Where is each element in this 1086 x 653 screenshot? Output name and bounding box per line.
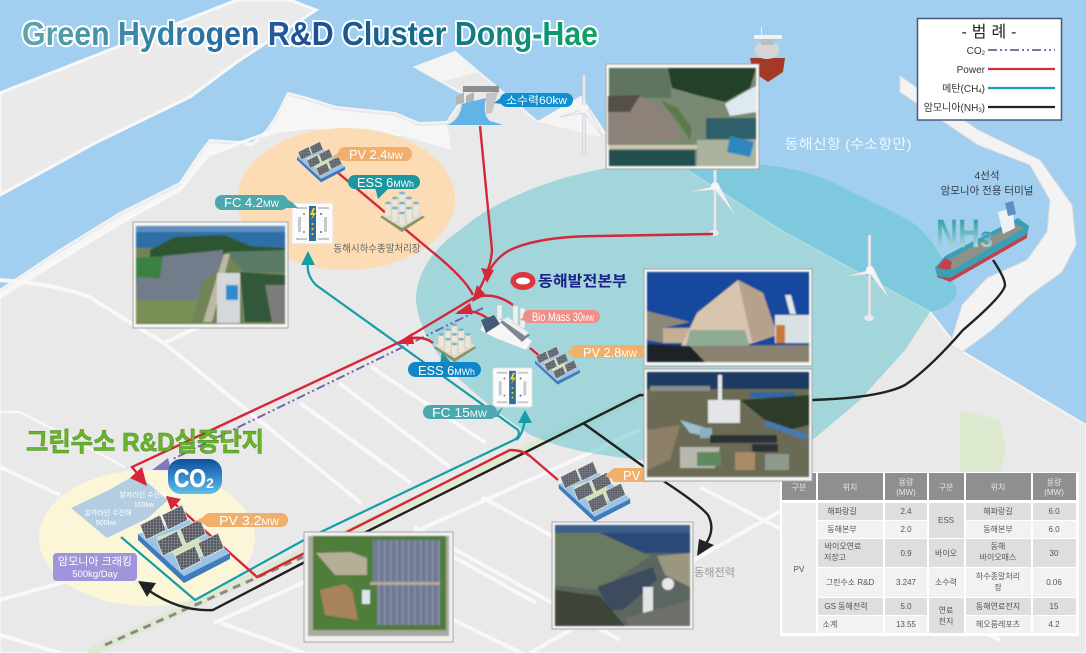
table: capacity by site: ESS bbox=[938, 516, 954, 525]
table: capacity by site: 해파랑길 bbox=[827, 506, 857, 516]
legend: 3 bbox=[978, 108, 982, 114]
NH3 ship bbox=[935, 201, 1029, 282]
wind turbine 2 bbox=[688, 170, 735, 236]
photo: bottom-left solar field bbox=[304, 532, 453, 642]
legend: ) bbox=[982, 103, 985, 114]
table: capacity by site: 구분 bbox=[792, 483, 806, 492]
label: ammonia terminal: 4선석 bbox=[974, 170, 1000, 182]
photo: biomass building bbox=[644, 269, 812, 366]
table: capacity by site: 저장고 bbox=[824, 552, 846, 562]
solar array: PV bottom bbox=[559, 461, 630, 522]
wind turbine 1 bbox=[560, 75, 603, 161]
table: capacity by site: 0.9 bbox=[900, 549, 912, 558]
electrolyser plots bbox=[71, 474, 168, 538]
zone: sewage plant (peach) bbox=[237, 128, 455, 270]
table: capacity by site: 그린수소 R&D bbox=[826, 577, 874, 587]
table: capacity by site: 하수종말처리 bbox=[976, 571, 1020, 581]
label: ESS head office: ESS 6MWh bbox=[418, 363, 475, 378]
solar array: PV 2.8 bbox=[535, 346, 580, 385]
label: PV 3.2: PV 3.2 MW bbox=[219, 513, 280, 528]
label: hydro 60kW: 소수력60kw bbox=[506, 94, 567, 107]
table: capacity by site: 0.06 bbox=[1046, 578, 1062, 587]
label: sewage plant name: 동해시하수종말처리장 bbox=[334, 242, 420, 255]
fuel cell 4.2 bbox=[292, 203, 333, 244]
label: FC 4.2: FC 4.2MW bbox=[224, 195, 279, 210]
road network bbox=[0, 127, 1000, 653]
table: capacity by site: 동해 bbox=[991, 541, 1005, 551]
table: capacity by site: 소수력 bbox=[935, 577, 957, 587]
legend: 메탄(CH bbox=[942, 84, 978, 95]
legend: Power bbox=[957, 65, 986, 76]
label: FC 15: FC 15 MW bbox=[432, 405, 488, 420]
table: capacity by site: 2.4 bbox=[900, 507, 912, 516]
legend: - 범 례 - bbox=[962, 23, 1016, 41]
table: capacity by site: 6.0 bbox=[1048, 507, 1060, 516]
legend: 2 bbox=[982, 51, 986, 57]
label: Donghae power: 동해전력 bbox=[694, 565, 735, 579]
wind turbine 3 bbox=[843, 235, 890, 321]
label: PV bottom bbox=[605, 468, 667, 483]
photo: coal terminal bbox=[606, 64, 759, 169]
table: capacity by site: 30 bbox=[1050, 549, 1059, 558]
ammonia lines bbox=[138, 260, 1005, 610]
label: hydro 60kW bbox=[494, 93, 573, 107]
label: ammonia terminal: 암모니아 전용 터미널 bbox=[941, 185, 1033, 197]
label: PV 2.4: PV 2.4MW bbox=[349, 147, 403, 162]
table: capacity by site: 용량 bbox=[1047, 477, 1062, 487]
label: ammonia cracking: 암모니아 크래킹 bbox=[58, 555, 132, 568]
electrolyser plots: 500kw bbox=[96, 520, 117, 527]
legend bbox=[918, 18, 1062, 120]
table: capacity by site: GS 동해전력 bbox=[824, 601, 868, 611]
legend: ) bbox=[982, 84, 985, 95]
power lines bbox=[130, 126, 713, 577]
photo: power station aerial bbox=[644, 369, 812, 481]
table: capacity by site: 동해연료전지 bbox=[976, 601, 1020, 611]
table: capacity by site: PV bbox=[794, 565, 805, 574]
table: capacity by site: 바이오매스 bbox=[980, 552, 1016, 562]
table: capacity by site: (MW) bbox=[896, 488, 916, 497]
logo: EWP head office bbox=[510, 272, 627, 290]
solar array: PV 3.2 bbox=[138, 505, 230, 583]
photo: GS power plant bbox=[552, 522, 693, 629]
table: capacity by site: 3.247 bbox=[896, 578, 917, 587]
table: capacity by site: 해파랑길 bbox=[983, 506, 1013, 516]
photo: sewage plant bbox=[133, 222, 288, 328]
badge: CO2: CO bbox=[174, 465, 206, 493]
label: ammonia terminal bbox=[941, 170, 1033, 197]
label: ESS head office bbox=[408, 352, 481, 378]
badge: CO2: 2 bbox=[206, 475, 214, 491]
label: PV 2.8: PV 2.8MW bbox=[583, 345, 637, 360]
label: ammonia cracking: 500kg/Day bbox=[72, 569, 118, 580]
table: capacity by site: 15 bbox=[1050, 602, 1059, 611]
biomass plant icon bbox=[480, 305, 532, 350]
NH3 ship: 3 bbox=[980, 227, 993, 252]
methane lines bbox=[121, 251, 532, 600]
ESS unit: head office bbox=[434, 323, 476, 362]
table: capacity by site: 2.0 bbox=[900, 525, 912, 534]
label: FC 15 bbox=[423, 405, 503, 420]
badge: CO2 bbox=[168, 459, 222, 494]
label: ammonia cracking bbox=[53, 553, 137, 581]
label: hydrogen port: 동해신항 (수소항만) bbox=[784, 136, 912, 152]
table: capacity by site: 구분 bbox=[939, 483, 953, 492]
table: capacity by site: 6.0 bbox=[1048, 525, 1060, 534]
table: capacity by site: 용량 bbox=[899, 477, 914, 487]
label: PV bottom: PV bbox=[623, 468, 641, 483]
table: capacity by site: 위치 bbox=[991, 483, 1005, 492]
legend: 4 bbox=[978, 89, 982, 95]
label: Bio Mass: Bio Mass 30MW bbox=[532, 310, 594, 324]
label: PV 2.8 bbox=[566, 345, 644, 360]
table: capacity by site: (MW) bbox=[1044, 488, 1064, 497]
label: ESS sewage plant: ESS 6MWh bbox=[357, 175, 414, 190]
table: capacity by site: 전지 bbox=[939, 616, 953, 626]
table: capacity by site bbox=[780, 472, 1079, 636]
logo: EWP head office: 동해발전본부 bbox=[538, 273, 627, 290]
NH3 ship: NH bbox=[936, 212, 980, 256]
electrolyser plots: 알카라인 수전해 bbox=[84, 508, 132, 517]
table: capacity by site: 헤오름레포츠 bbox=[976, 620, 1020, 629]
table: capacity by site: 동해본부 bbox=[827, 524, 857, 534]
table: capacity by site: 위치 bbox=[843, 483, 857, 492]
ESS unit: sewage plant bbox=[380, 192, 425, 232]
table: capacity by site: 동해본부 bbox=[983, 524, 1013, 534]
hydro power icon bbox=[447, 86, 503, 125]
table: capacity by site: 13.55 bbox=[896, 620, 917, 629]
table: capacity by site: 바이오연료 bbox=[825, 541, 861, 551]
table: capacity by site: 바이오 bbox=[935, 548, 957, 558]
top ship icon bbox=[750, 27, 785, 82]
label: PV 2.4 bbox=[332, 147, 412, 162]
table: capacity by site: 4.2 bbox=[1048, 620, 1060, 629]
table: capacity by site: 소계 bbox=[823, 619, 837, 629]
fuel cell 15 bbox=[493, 368, 532, 407]
solar array: PV 2.4 bbox=[297, 142, 345, 182]
electrolyser plots: 알카라인 수전해 bbox=[119, 490, 167, 499]
electrolyser plots: 100kw bbox=[134, 502, 155, 509]
zone: R&D site (yellow) bbox=[39, 470, 255, 606]
heading: R&D demonstration site: 그린수소 R&D실증단지 bbox=[26, 427, 264, 457]
label: ESS sewage plant bbox=[348, 175, 420, 199]
table: capacity by site: 5.0 bbox=[900, 602, 912, 611]
zone: hydrogen port (teal) bbox=[416, 162, 957, 465]
table: capacity by site: 연료 bbox=[939, 606, 953, 615]
breakwater bbox=[900, 76, 1076, 352]
CO2 line bbox=[152, 308, 483, 470]
label: FC 4.2 bbox=[215, 195, 298, 210]
railway bbox=[105, 557, 303, 645]
legend: 암모니아(NH bbox=[924, 103, 978, 114]
legend: CO bbox=[967, 46, 982, 57]
title: Green Hydrogen R&D Cluster Dong-Hae bbox=[22, 15, 598, 52]
table: capacity by site: 장 bbox=[994, 582, 1002, 592]
label: PV 3.2 bbox=[196, 513, 288, 528]
